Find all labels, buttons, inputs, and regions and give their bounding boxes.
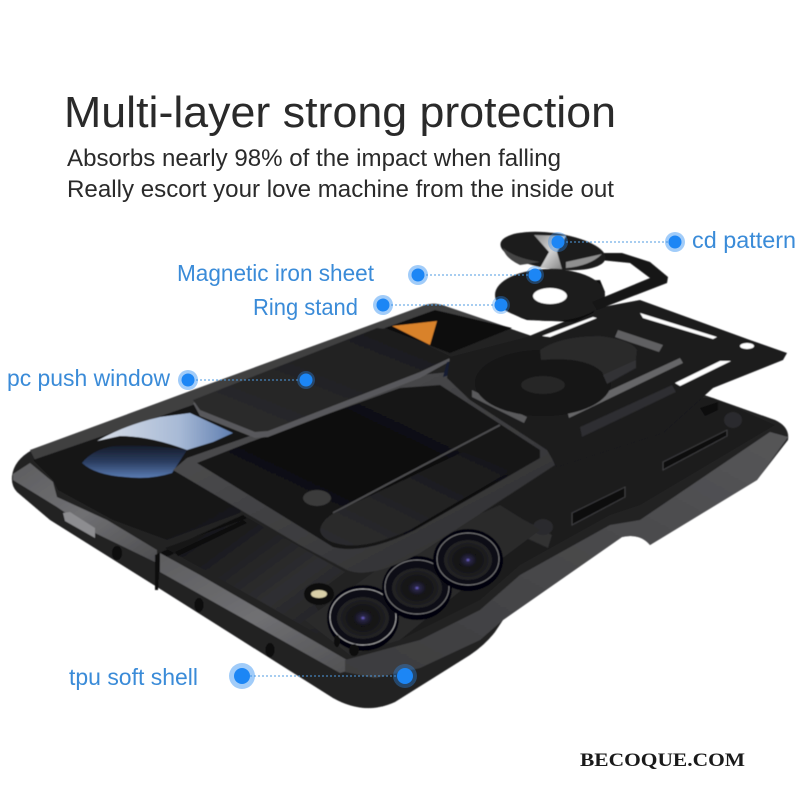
subtitle text block	[67, 145, 614, 203]
metal stand plate	[447, 300, 787, 467]
annotation: magnetic iron sheet: Magnetic iron sheet	[177, 260, 375, 286]
cd pattern disc	[498, 226, 608, 276]
annotation: tpu soft shell: tpu soft shell	[69, 664, 198, 690]
ring arm	[592, 253, 668, 310]
side rim band	[160, 553, 372, 673]
pc push window slab	[193, 328, 452, 438]
small pins	[334, 635, 340, 647]
subtitle text block: Absorbs nearly 98% of the impact when falling	[67, 145, 561, 172]
lens 3	[433, 529, 503, 591]
rear lower-left panel	[165, 518, 345, 650]
subtitle text block: Really escort your love machine from the inside out	[67, 176, 614, 203]
ring stand	[495, 253, 668, 322]
left display screen	[33, 405, 270, 540]
annotation: cd pattern	[548, 227, 796, 253]
top rim	[30, 304, 510, 462]
wallpaper planet	[82, 446, 187, 478]
phone case illustration	[12, 226, 788, 708]
camera island	[304, 505, 540, 656]
annotation: ring stand	[253, 294, 510, 320]
annotation: pc push window: pc push window	[7, 365, 170, 391]
right side band	[345, 432, 788, 678]
frame hole	[303, 490, 331, 506]
jack hole	[112, 546, 122, 560]
hinge gap	[155, 515, 248, 590]
back panel right	[330, 398, 775, 640]
left lower rim band	[13, 463, 157, 563]
plate slots	[542, 317, 597, 337]
annotation: ring stand: Ring stand	[253, 294, 358, 320]
stand hinge	[540, 336, 637, 383]
usb port	[63, 512, 95, 538]
annotation: pc push window	[7, 365, 315, 391]
flash	[304, 583, 334, 605]
window opening wallpaper	[385, 310, 512, 377]
plate bars	[567, 358, 683, 418]
watermark: BECOQUE.COM	[580, 750, 745, 771]
lens 2	[382, 556, 452, 620]
annotation: magnetic iron sheet	[177, 260, 544, 286]
title: Multi-layer strong protection	[64, 88, 616, 137]
lens 1	[327, 585, 399, 651]
wallpaper swirl	[97, 413, 233, 450]
tpu outer shell	[12, 304, 788, 708]
camera slider frame	[173, 372, 555, 573]
side button holes	[194, 598, 274, 657]
annotation: tpu soft shell	[69, 663, 417, 690]
vents and screw	[480, 402, 742, 548]
lens window	[320, 452, 512, 545]
slider rail	[333, 425, 500, 513]
annotation: cd pattern: cd pattern	[692, 227, 796, 253]
rotating disc	[475, 350, 611, 416]
